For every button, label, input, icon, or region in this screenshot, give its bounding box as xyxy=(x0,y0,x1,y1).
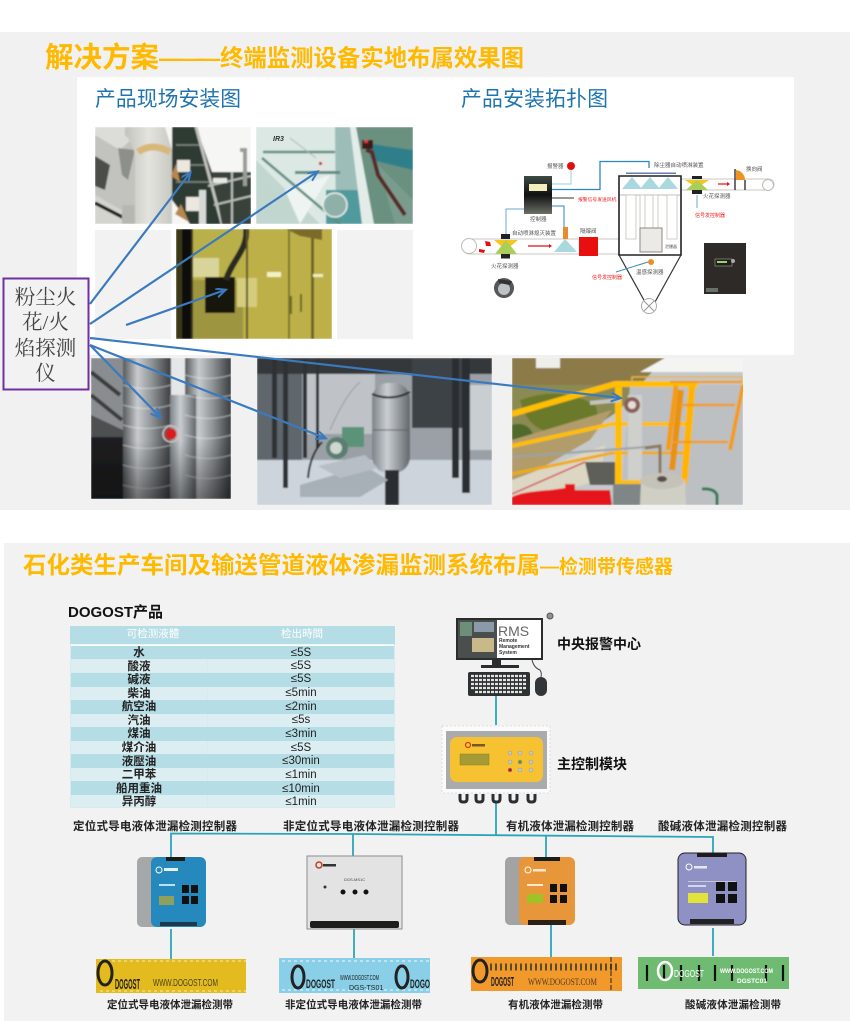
sparks and flow arrows xyxy=(479,182,730,253)
signal wires xyxy=(506,162,697,272)
label: acid alkali controller: 酸碱液体泄漏检测控制器 xyxy=(658,819,788,833)
topology labels: 换向阀 xyxy=(746,165,763,173)
spark sensor: lower xyxy=(494,234,518,258)
strip: acid alkali sensor xyxy=(638,957,789,989)
title: solutions: 终端监测设备实地布属效果图 xyxy=(220,45,524,71)
duct: upper xyxy=(677,179,774,190)
callout: dust spark and flame detector: 花/火 xyxy=(22,311,69,334)
table: detectable liquids and times xyxy=(70,626,395,808)
strip: acid alkali sensor: DOGOST xyxy=(674,969,704,980)
strip: positional conductive sensor xyxy=(96,959,246,993)
strip: non-positional conductive sensor: DOGOST xyxy=(306,977,335,991)
reversing valve xyxy=(735,169,745,190)
network wiring xyxy=(171,696,713,959)
label: organic liquid strip: 有机液体泄漏检测带 xyxy=(508,998,603,1011)
table: detectable liquids and times: 酸液 xyxy=(128,659,151,673)
device: grey controller: DGS-MS1C xyxy=(344,877,365,882)
blast valve xyxy=(579,237,598,256)
heading: DOGOST products: DOGOST产品 xyxy=(68,604,163,621)
table: detectable liquids and times: 可检测液體 xyxy=(127,627,180,640)
table: detectable liquids and times: ≤5S xyxy=(291,673,312,685)
topology labels: 信号发控制器 xyxy=(695,212,725,219)
callout: dust spark and flame detector xyxy=(4,278,88,390)
topology diagram xyxy=(462,161,774,314)
spark sensor: upper xyxy=(685,176,709,194)
section background: liquid leak monitoring xyxy=(4,543,850,1021)
device: blue controller xyxy=(137,857,206,927)
topology labels: 火花探测器 xyxy=(491,262,519,270)
table: detectable liquids and times: 水 xyxy=(133,645,145,659)
topology labels xyxy=(491,161,763,281)
arrows: detector to installation points xyxy=(90,172,620,438)
table: detectable liquids and times: ≤5s xyxy=(292,714,310,726)
table: detectable liquids and times: 汽油 xyxy=(128,713,150,727)
table: detectable liquids and times: 液壓油 xyxy=(122,754,156,768)
table: detectable liquids and times: 碱液 xyxy=(128,672,151,686)
icon: main controller module xyxy=(442,726,550,802)
section background: deployment xyxy=(0,32,850,510)
table: detectable liquids and times: 煤介油 xyxy=(122,740,156,754)
strip: organic liquid sensor xyxy=(471,957,622,991)
alarm xyxy=(567,162,575,170)
table: detectable liquids and times: 检出時間 xyxy=(281,627,323,640)
photo: yellow cabinet sensor xyxy=(176,229,332,339)
table: detectable liquids and times: 船用重油 xyxy=(116,781,162,795)
title: solutions: —— xyxy=(159,45,221,71)
label: organic liquid controller: 有机液体泄漏检测控制器 xyxy=(506,819,634,833)
table: detectable liquids and times: ≤5S xyxy=(291,742,312,754)
strip: non-positional conductive sensor xyxy=(279,958,430,993)
topology labels: 隔爆阀 xyxy=(580,227,597,235)
label: positional conductive controller: 定位式导电液体泄漏检测控制器 xyxy=(73,819,238,833)
photo: silver ducts xyxy=(91,358,231,499)
controller xyxy=(524,176,552,214)
topology labels: 自动喷淋熄灭装置 xyxy=(512,229,557,237)
table: detectable liquids and times: ≤3min xyxy=(285,728,317,740)
topology labels: 报警信号发送风机 xyxy=(578,196,617,203)
title: solutions: 解决方案 xyxy=(45,42,159,74)
photo: refinery pipes xyxy=(95,127,251,224)
callout: dust spark and flame detector: 焰探测 xyxy=(15,337,76,360)
table: detectable liquids and times: 航空油 xyxy=(122,699,156,713)
strip: non-positional conductive sensor: DOGO xyxy=(410,977,430,991)
duct: lower xyxy=(462,239,627,254)
table: detectable liquids and times: ≤1min xyxy=(285,796,317,808)
callout: dust spark and flame detector: 仪 xyxy=(35,362,56,385)
valve: rotary xyxy=(642,298,656,314)
label: acid alkali strip: 酸碱液体泄漏检测带 xyxy=(685,998,781,1011)
heading: topology: 产品安装拓扑图 xyxy=(461,88,608,111)
topology labels: 除尘器自动喷淋装置 xyxy=(654,161,704,169)
icon: RMS workstation: Management xyxy=(499,644,530,650)
topology labels: 信号发控制器 xyxy=(592,274,622,281)
strip: organic liquid sensor: DOGOST xyxy=(491,974,514,989)
table: detectable liquids and times: 二甲苯 xyxy=(122,767,157,781)
topology labels: 控制器 xyxy=(530,215,547,223)
callout: dust spark and flame detector: 粉尘火 xyxy=(15,286,76,309)
control panel device xyxy=(704,243,746,294)
strip: acid alkali sensor: WWW.DOGOST.COM xyxy=(720,969,773,975)
table: detectable liquids and times: ≤5S xyxy=(291,660,312,672)
strip: non-positional conductive sensor: DGS-TS01 xyxy=(349,985,383,992)
strip: non-positional conductive sensor: WWW.DOGOST.COM xyxy=(340,975,379,982)
topology labels: 火花探测器 xyxy=(703,192,731,200)
device: orange controller xyxy=(505,857,575,925)
placeholder tile: left xyxy=(95,230,171,339)
placeholder tile: right xyxy=(337,230,413,339)
title: petrochemical leak monitoring: 石化类生产车间及输送管道液体渗漏监测系统布属—检测带传感器 xyxy=(23,551,673,578)
nozzle xyxy=(554,227,577,252)
icon: RMS workstation xyxy=(456,613,553,696)
table: detectable liquids and times: ≤5S xyxy=(291,647,312,659)
filter body xyxy=(619,172,681,302)
icon: RMS workstation: RMS xyxy=(498,623,529,639)
strip: positional conductive sensor: WWW.DOGOST.COM xyxy=(153,978,218,989)
photo: yellow railing xyxy=(512,358,743,505)
label: non-positional conductive controller: 非定位式导电液体泄漏检测控制器 xyxy=(283,819,460,833)
photo: tank roof sensor xyxy=(256,127,413,224)
flame detector device xyxy=(494,278,514,298)
label: non-positional conductive strip: 非定位式导电液体泄漏检测带 xyxy=(285,998,422,1011)
panel: white content panel xyxy=(77,77,794,355)
icon: RMS workstation: System xyxy=(499,650,517,656)
label: positional conductive strip: 定位式导电液体泄漏检测带 xyxy=(107,998,233,1011)
table: detectable liquids and times: 柴油 xyxy=(128,686,150,700)
strip: acid alkali sensor: DGSTC01 xyxy=(737,978,767,985)
title: solutions: —— xyxy=(159,45,206,71)
strip: organic liquid sensor: WWW.DOGOST.COM xyxy=(528,978,597,988)
strip: positional conductive sensor: DOGOST xyxy=(115,976,140,993)
photo: tank roof sensor: IR3 xyxy=(273,136,284,143)
icon: RMS workstation: Remote xyxy=(499,638,518,644)
heading: on-site installation: 产品现场安装图 xyxy=(95,88,241,111)
topology labels: 报警器 xyxy=(547,162,564,170)
topology labels: 泄爆器 xyxy=(665,243,677,249)
label: main control module: 主控制模块 xyxy=(557,756,627,772)
table: detectable liquids and times: 异丙醇 xyxy=(122,794,157,808)
table: detectable liquids and times: ≤1min xyxy=(285,769,317,781)
temperature sensor xyxy=(648,259,654,265)
device: grey controller xyxy=(307,856,402,929)
table: detectable liquids and times: ≤30min xyxy=(282,755,320,767)
table: detectable liquids and times: 煤油 xyxy=(128,726,150,740)
table: detectable liquids and times: ≤2min xyxy=(285,701,317,713)
label: central alarm center: 中央报警中心 xyxy=(557,636,641,652)
device: purple controller xyxy=(678,853,746,925)
table: detectable liquids and times: ≤10min xyxy=(282,783,320,795)
table: detectable liquids and times: ≤5min xyxy=(285,687,317,699)
photo: pump room xyxy=(257,358,492,505)
topology labels: 温感探测器 xyxy=(636,268,664,276)
